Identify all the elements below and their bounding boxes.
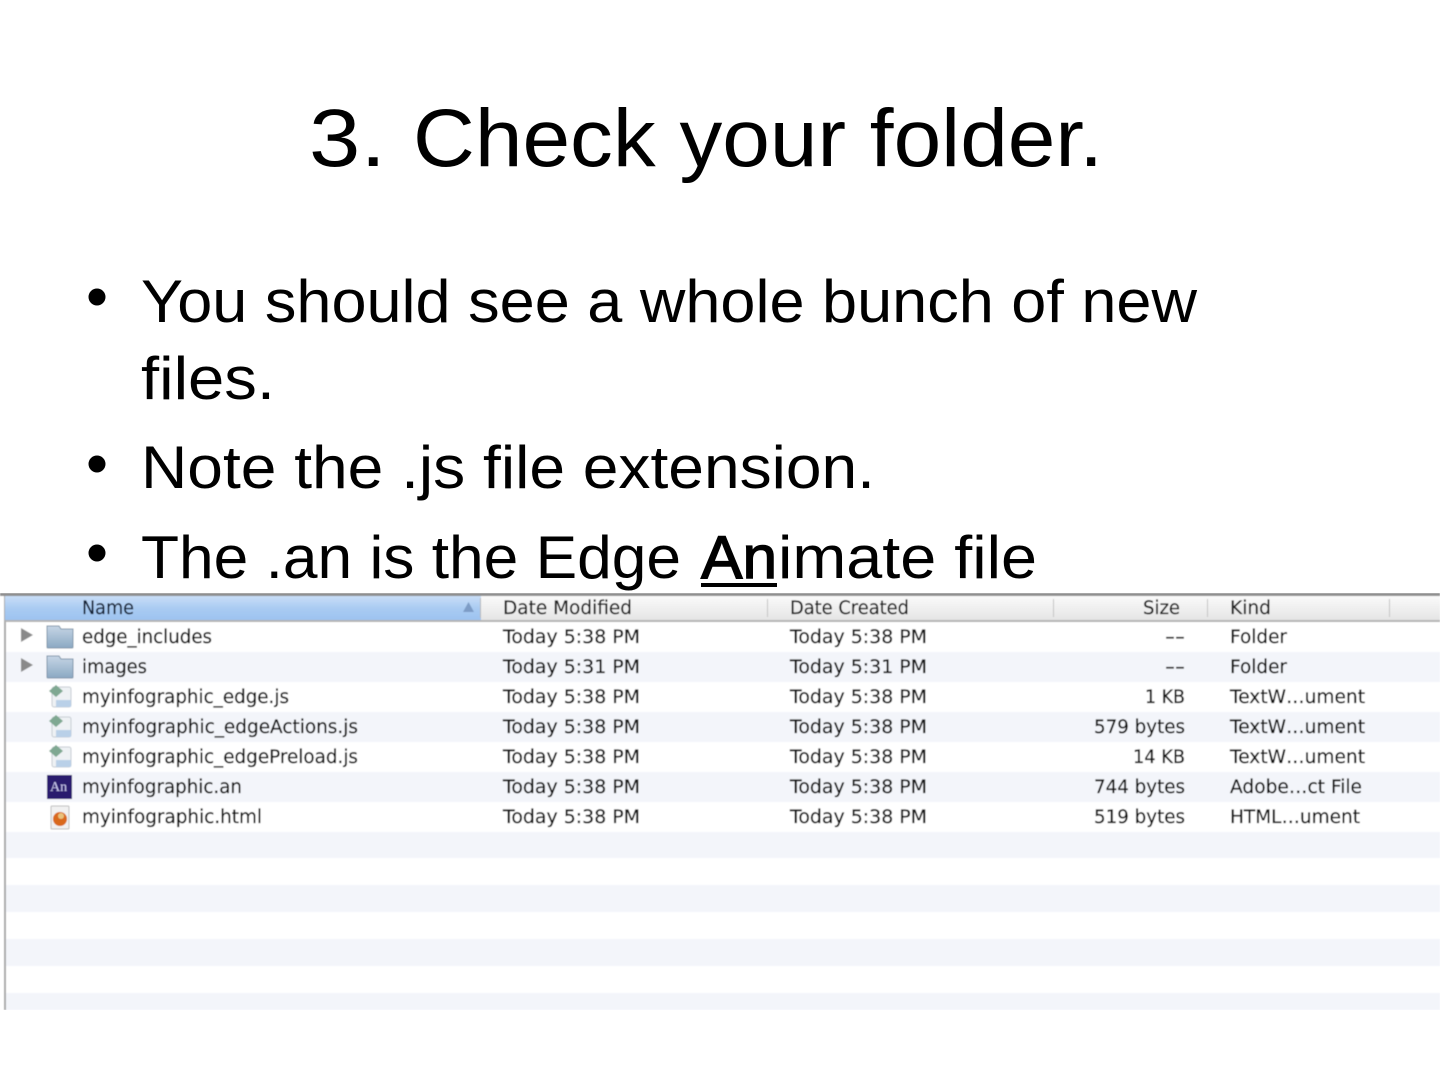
column header: Name	[82, 598, 134, 619]
bullet list	[88, 268, 1198, 591]
row: myinfographic.an: Today 5:38 PM	[502, 777, 640, 798]
row: myinfographic_edgePreload.js: TextW…ument	[1229, 747, 1365, 768]
row: myinfographic.html	[51, 806, 1360, 829]
bullet: an file: An	[701, 524, 777, 591]
row: myinfographic_edgeActions.js: 579 bytes	[1094, 717, 1185, 738]
row: edge_includes: Today 5:38 PM	[789, 627, 927, 648]
row: myinfographic.an	[47, 775, 1362, 799]
row: edge_includes: --	[1165, 627, 1185, 648]
title: Check your folder.	[413, 93, 1103, 184]
row: myinfographic.html: 519 bytes	[1094, 807, 1185, 828]
row: edge_includes: Today 5:38 PM	[502, 627, 640, 648]
bullet: js extension: Note the .js file extension.	[141, 434, 875, 501]
row: myinfographic_edge.js	[49, 685, 1365, 708]
row: edge_includes	[21, 626, 1287, 648]
row: myinfographic_edgeActions.js: Today 5:38 PM	[789, 717, 927, 738]
icon: disclosure triangle	[21, 658, 33, 672]
icon: folder	[47, 656, 73, 678]
row: images: Today 5:31 PM	[502, 657, 640, 678]
row: myinfographic.html: myinfographic.html	[82, 807, 262, 828]
row: images: --	[1165, 657, 1185, 678]
column header: Kind	[1230, 598, 1271, 619]
row: myinfographic_edgeActions.js	[49, 715, 1365, 738]
bullet: new files	[88, 268, 1198, 412]
icon: script file	[49, 715, 71, 737]
row: myinfographic.html: Today 5:38 PM	[502, 807, 640, 828]
icon: Animate file	[47, 775, 72, 799]
row: edge_includes: edge_includes	[82, 627, 212, 648]
icon: Animate file: An	[50, 780, 67, 795]
column header: Size	[1143, 598, 1180, 619]
row: images	[21, 656, 1287, 678]
row: myinfographic.an: Adobe…ct File	[1230, 777, 1362, 798]
row: images: Folder	[1230, 657, 1287, 678]
row: myinfographic_edgePreload.js	[49, 745, 1365, 768]
list background stripes	[0, 594, 1440, 1010]
row: myinfographic_edgeActions.js: Today 5:38 PM	[502, 717, 640, 738]
icon: disclosure triangle	[21, 628, 33, 642]
row: myinfographic_edgePreload.js: myinfographic_edgePreload.js	[82, 747, 358, 768]
icon: script file	[49, 685, 71, 707]
row: myinfographic_edge.js: 1 KB	[1145, 687, 1185, 708]
row: myinfographic_edgePreload.js: Today 5:38 PM	[789, 747, 927, 768]
row: myinfographic_edge.js: Today 5:38 PM	[789, 687, 927, 708]
icon: script file	[49, 745, 71, 767]
row: myinfographic.html: Today 5:38 PM	[789, 807, 927, 828]
row: myinfographic.an: myinfographic.an	[82, 777, 242, 798]
column header	[0, 593, 1440, 622]
icon: browser file	[51, 806, 69, 829]
row: myinfographic_edge.js: myinfographic_edge.js	[82, 687, 289, 708]
column header: Date Modified	[503, 598, 632, 619]
icon: folder	[47, 626, 73, 648]
column header: Date Created	[790, 598, 909, 619]
row: myinfographic.an: Today 5:38 PM	[789, 777, 927, 798]
row: myinfographic_edge.js: Today 5:38 PM	[502, 687, 640, 708]
row: images: Today 5:31 PM	[789, 657, 927, 678]
row: myinfographic_edge.js: TextW…ument	[1229, 687, 1365, 708]
row: myinfographic_edgePreload.js: 14 KB	[1133, 747, 1185, 768]
row: edge_includes: Folder	[1230, 627, 1287, 648]
row: myinfographic_edgePreload.js: Today 5:38 PM	[502, 747, 640, 768]
row: myinfographic_edgeActions.js: myinfographic_edgeActions.js	[82, 717, 358, 738]
row: myinfographic_edgeActions.js: TextW…ument	[1229, 717, 1365, 738]
finder window screenshot	[0, 593, 1440, 1010]
bullet: new files: files.	[141, 345, 275, 412]
row: images: images	[82, 657, 147, 678]
bullet: an file: The .an is the Edge	[141, 524, 681, 591]
bullet: new files: You should see a whole bunch of new	[141, 268, 1198, 335]
bullet: an file: imate file	[778, 524, 1037, 591]
row: myinfographic.html: HTML…ument	[1230, 807, 1360, 828]
row: myinfographic.an: 744 bytes	[1094, 777, 1185, 798]
title: 3.	[309, 93, 386, 184]
bullet: an file	[88, 524, 1037, 591]
